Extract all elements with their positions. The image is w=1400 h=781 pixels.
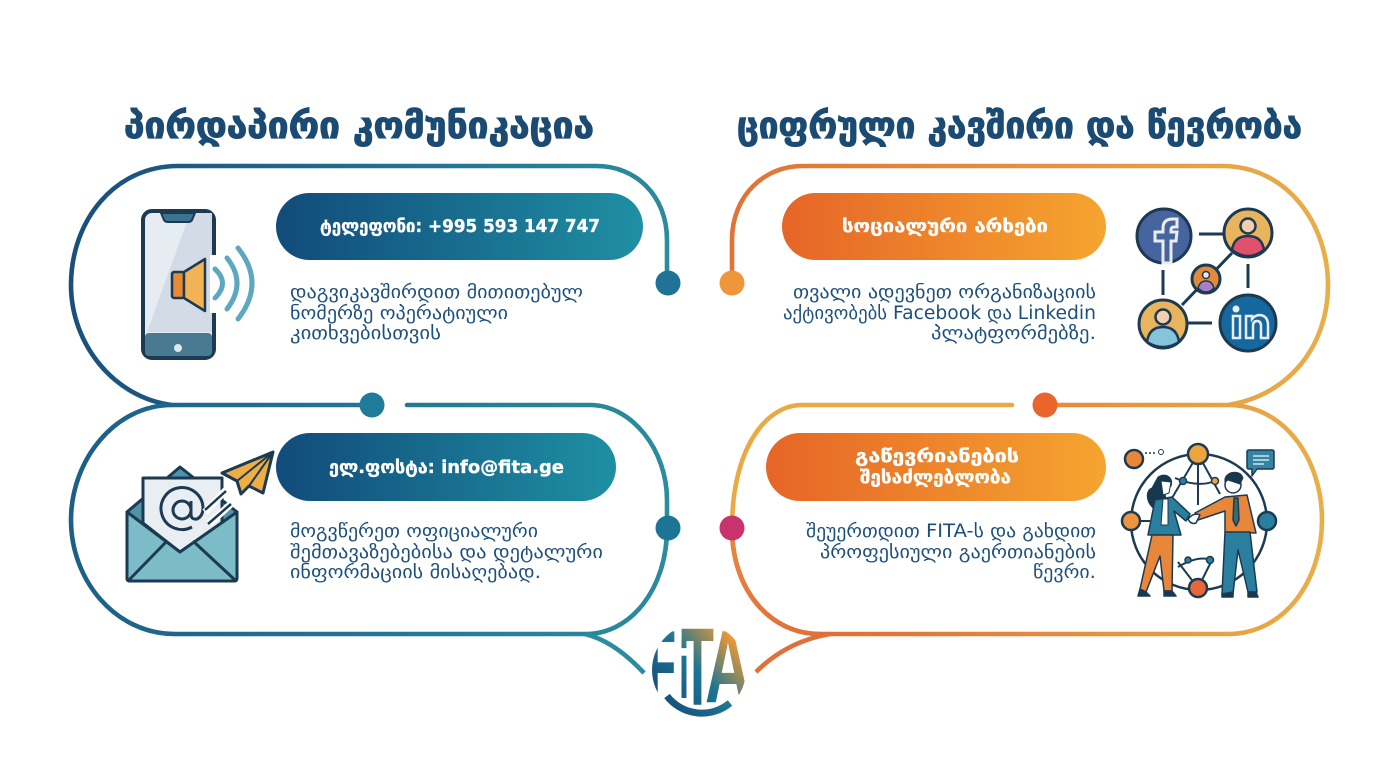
logo: FITA: F (648, 611, 676, 718)
text: membership description (806, 521, 1096, 583)
text: social description: აქტივობებს Facebook და Linkedin (783, 303, 1096, 324)
pill: social networks (782, 193, 1106, 260)
connector dot: email right (656, 516, 680, 540)
logo: FITA: A (705, 609, 751, 724)
woman (1138, 475, 1190, 596)
text: email description: შემთავაზებებისა და დეტალური (290, 542, 603, 563)
icon: handshake with network (1122, 444, 1276, 597)
text: social description: პლატფორმებზე. (931, 323, 1096, 344)
connector line: email panel left (71, 405, 667, 634)
icon: social network graph (1137, 209, 1276, 351)
panel: phone (71, 166, 680, 405)
connector dot: membership left (720, 516, 744, 540)
panel: social networks (720, 166, 1328, 405)
text: membership description: შეუერთდით FITA-ს და გახდით (806, 521, 1096, 542)
pill: phone number (276, 193, 643, 260)
pill: email address: ელ.ფოსტა: info@fita.ge (329, 457, 564, 478)
text: email description (290, 521, 603, 583)
text: membership description: პროფესიული გაერთიანების (820, 542, 1096, 563)
logo: FITA: i (679, 626, 689, 715)
connector line: to logo right (756, 634, 830, 672)
pill: membership opportunity: შესაძლებლობა (860, 467, 1011, 488)
icon: envelope with paper plane (127, 452, 273, 581)
pill: phone number: ტელეფონი: +995 593 147 747 (320, 216, 600, 237)
pill: email address (276, 433, 616, 501)
connector line: membership bottom left (732, 528, 820, 634)
logo: FITA (652, 628, 744, 717)
icon: phone with speaker (143, 211, 252, 358)
connector line: membership panel outer (732, 405, 1322, 634)
connector dot: phone panel (656, 270, 680, 296)
connector line: email panel right (407, 405, 667, 530)
text: email description: მოგვწერეთ ოფიციალური (290, 521, 538, 542)
pill: membership opportunity (766, 433, 1106, 501)
panel: membership (720, 392, 1322, 672)
connector line: membership left overlay (732, 405, 1012, 528)
panel: email (71, 392, 680, 673)
connector line: social panel (732, 166, 1328, 405)
text: phone description: დაგვიკავშირდით მითითებულ (290, 282, 583, 303)
man (1195, 472, 1258, 597)
logo: FITA: T (681, 606, 714, 729)
text: phone description (290, 282, 583, 344)
connector dot: email top (360, 392, 384, 418)
connector dot: membership top (1032, 392, 1058, 418)
heading: digital connection and membership: ციფრული კავშირი და წევრობა (737, 104, 1302, 147)
connector dot: social panel (720, 270, 744, 296)
connector line: to logo (585, 634, 644, 673)
pill: social networks: სოციალური არხები (842, 216, 1048, 237)
heading: direct communication: პირდაპირი კომუნიკაცია (124, 104, 594, 147)
text: membership description: წევრი. (1033, 562, 1096, 583)
text: phone description: კითხვებისთვის (290, 323, 441, 344)
pill: membership opportunity: გაწევრიანების (855, 446, 1019, 467)
text: email description: ინფორმაციის მისაღებად. (290, 562, 541, 583)
text: phone description: ნომერზე ოპერატიული (290, 303, 508, 324)
text: social description: თვალი ადევნეთ ორგანიზაციის (793, 282, 1096, 303)
text: social description (783, 282, 1096, 344)
connector line: phone panel (71, 166, 667, 405)
